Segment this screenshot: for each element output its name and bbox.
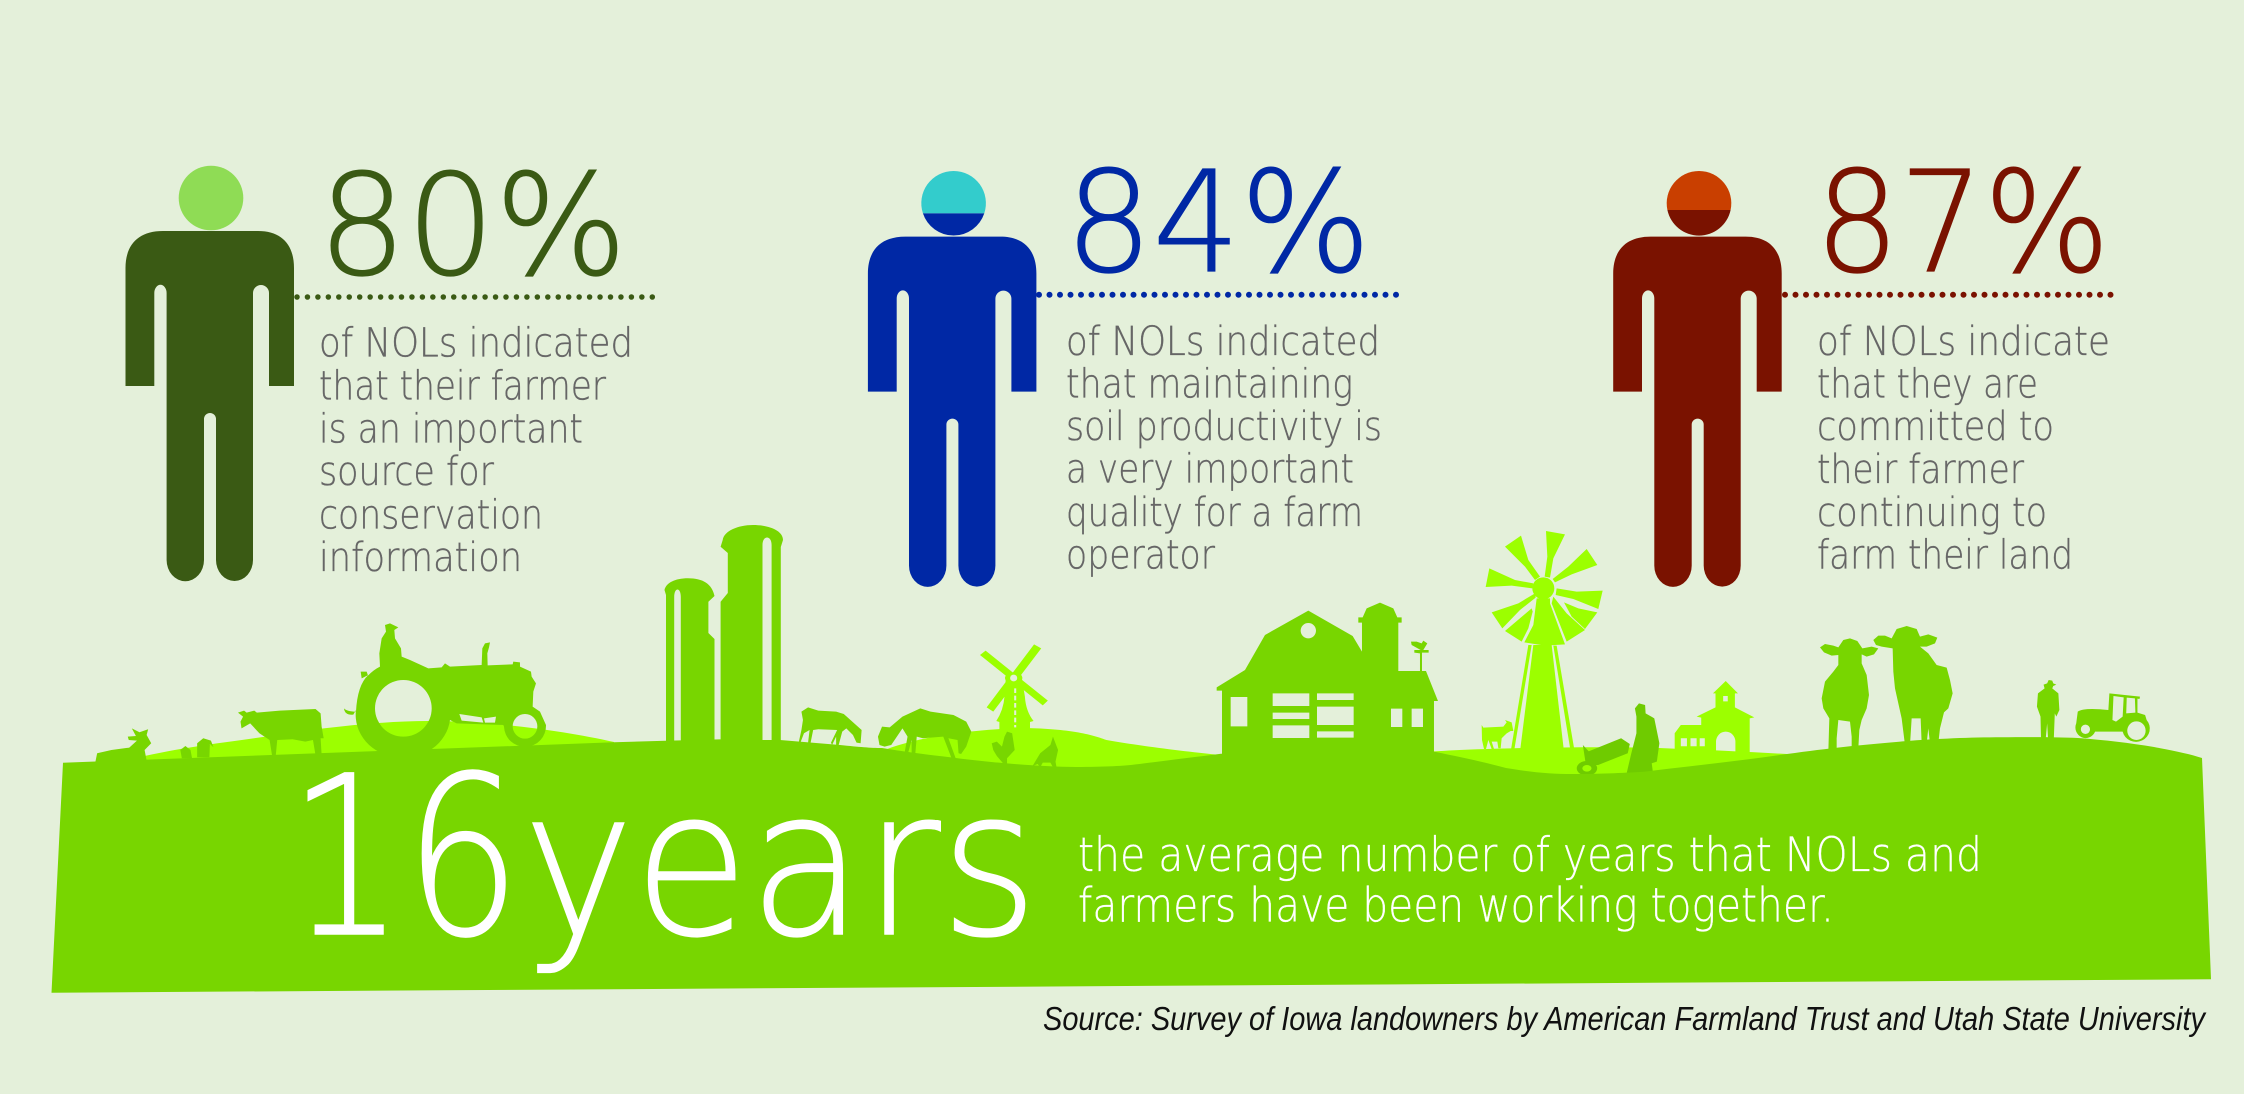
panel: 80% stat bbox=[126, 145, 657, 581]
headline: 16 years: 16 bbox=[288, 730, 521, 987]
icon: grazing horses bbox=[799, 707, 971, 759]
text: 80% description: that their farmer bbox=[319, 363, 606, 409]
icon: blue person bbox=[868, 171, 1036, 587]
text: years description: farmers have been working together. bbox=[1078, 879, 1834, 934]
ground band bbox=[52, 737, 2211, 993]
text: 87% description: of NOLs indicate bbox=[1817, 319, 2110, 365]
text: 80% description: source for bbox=[319, 449, 494, 495]
panel: 87% stat bbox=[1613, 142, 2115, 587]
icon: dutch windmill bbox=[980, 644, 1048, 733]
number: 84%: 84% bbox=[1065, 142, 1371, 305]
icon: tractor and driver bbox=[344, 623, 546, 758]
text: 80% description: information bbox=[319, 535, 522, 581]
panel: 84% stat bbox=[868, 142, 1398, 587]
text: 84% description: quality for a farm bbox=[1066, 490, 1363, 536]
text: 80% description: is an important bbox=[319, 407, 583, 453]
icon: small tractor bbox=[2075, 693, 2150, 742]
icon: rooster and hen bbox=[992, 732, 1058, 767]
text: 80% description bbox=[319, 321, 633, 581]
hills: bright green bbox=[145, 721, 1787, 800]
text: 84% description: soil productivity is bbox=[1066, 404, 1382, 450]
icon: man with wheelbarrow bbox=[1577, 703, 1659, 776]
text: 80% description: conservation bbox=[319, 492, 543, 538]
number: 80%: 80% bbox=[318, 145, 627, 308]
text: 87% description: their farmer bbox=[1817, 447, 2024, 493]
text: years description: the average number of years that NOLs and bbox=[1078, 828, 1982, 883]
text: 84% description: operator bbox=[1066, 532, 1215, 578]
text: 87% description: that they are bbox=[1817, 361, 2038, 407]
icon: silos bbox=[664, 525, 783, 745]
text: 84% description: of NOLs indicated bbox=[1066, 319, 1380, 365]
icon: schoolhouse bbox=[1675, 681, 1754, 755]
farm landscape bbox=[52, 525, 2211, 993]
dotted rule bbox=[1039, 292, 1398, 298]
text: 84% description bbox=[1066, 319, 1382, 578]
text: 80% description: of NOLs indicated bbox=[319, 321, 633, 367]
icon: lying cow bbox=[95, 728, 151, 763]
text: 84% description: a very important bbox=[1066, 447, 1354, 493]
text: years description bbox=[1078, 828, 1982, 934]
text: 87% description: farm their land bbox=[1817, 532, 2073, 578]
icon: red person bbox=[1613, 171, 1782, 587]
icon: barn bbox=[1217, 603, 1438, 763]
icon: water-pumping windmill bbox=[1486, 531, 1603, 752]
icon: farmer bbox=[2037, 680, 2059, 740]
text: 87% description: committed to bbox=[1817, 404, 2054, 450]
icon: small birds bbox=[180, 738, 213, 758]
icon: standing cow bbox=[238, 709, 324, 756]
icon: green person bbox=[126, 166, 294, 581]
text: 87% description: continuing to bbox=[1817, 490, 2047, 536]
dotted rule bbox=[297, 294, 657, 300]
headline: 16 years bbox=[288, 730, 1038, 987]
icon: goat bbox=[1482, 720, 1513, 749]
dotted rule bbox=[1785, 292, 2115, 298]
number: 87%: 87% bbox=[1815, 142, 2110, 305]
text: 84% description: that maintaining bbox=[1066, 361, 1353, 407]
icon: pair of cows bbox=[1820, 626, 1953, 752]
text: 87% description bbox=[1817, 319, 2110, 578]
headline: 16 years: years bbox=[523, 746, 1038, 982]
